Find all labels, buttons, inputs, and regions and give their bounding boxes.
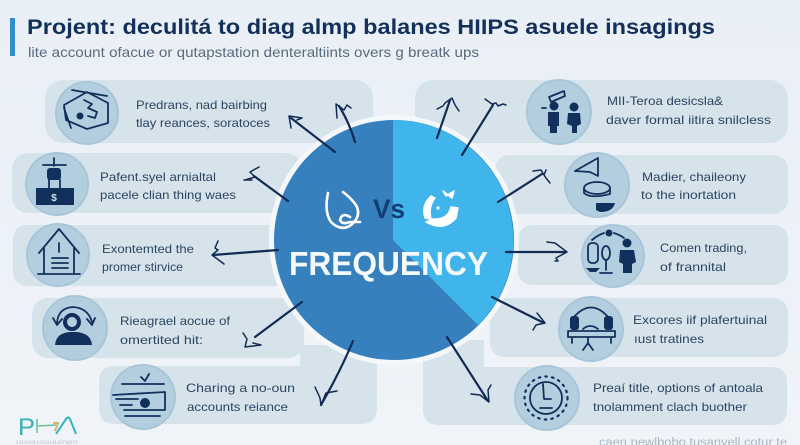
arrow: right 1a — [437, 98, 459, 138]
arrow: right 5 — [447, 337, 491, 402]
arrow: right 4 — [492, 297, 545, 330]
text block: tlay reances, soratoces — [136, 116, 270, 130]
text block — [606, 94, 771, 127]
arrow: right 3 — [506, 242, 567, 261]
arrow: left 1b — [336, 104, 355, 142]
panel: left 4 — [32, 296, 304, 360]
icon: money stand: $ — [51, 193, 57, 204]
icon: people cycle — [582, 225, 644, 287]
icon: hexagon — [56, 82, 118, 144]
text block: ıust tratines — [634, 332, 704, 346]
panel: right 2 — [495, 153, 788, 217]
text block: Madier, chaileony — [642, 170, 746, 184]
text block: accounts reiance — [187, 400, 288, 414]
icon: money stand — [26, 153, 88, 215]
panel: right 3 — [518, 225, 788, 287]
panel: left 2 — [12, 153, 302, 215]
icon: clock — [515, 366, 579, 430]
text block: MII-Teroa desicsla& — [607, 94, 723, 108]
text block — [186, 381, 295, 414]
text block: Predrans, nad bairbing — [136, 98, 267, 112]
text block: tnolamment clach buother — [593, 400, 747, 414]
text block — [102, 242, 194, 274]
text block: of frannital — [660, 260, 726, 274]
text block — [136, 98, 270, 130]
text block — [120, 314, 231, 347]
arrow: left 5 — [315, 341, 353, 405]
icon: cone and disc — [565, 153, 629, 217]
arrow: left 1a — [289, 116, 335, 152]
icon: left white glyph — [327, 192, 360, 228]
text block: Comen trading, — [660, 241, 747, 255]
icon: headphones desk — [559, 297, 623, 361]
arrow: left 3 — [212, 241, 278, 264]
logo: P — [18, 414, 35, 441]
text block: pacele clian thing waes — [100, 188, 236, 202]
icon: house — [27, 224, 89, 286]
text block — [660, 241, 747, 274]
text block — [593, 381, 763, 414]
icon: checklist card — [111, 365, 175, 429]
panel: right 1 — [415, 80, 788, 144]
text block: to the inortation — [641, 188, 736, 202]
central circle — [269, 115, 519, 365]
text block: Excores iif plafertuinal — [633, 313, 767, 327]
panel: left 5 — [99, 345, 377, 429]
logo — [16, 414, 79, 445]
text block: Charing a no-oun — [186, 381, 295, 395]
arrow: right 2 — [498, 170, 550, 202]
subtitle: lite account ofacue or qutapstation denteraltiints overs g breatk ups — [28, 44, 479, 60]
label: FREQUENCY: FREQUENCY — [289, 245, 488, 282]
panel: left 3 — [13, 224, 288, 286]
text block: Pafent.syel arnialtal — [100, 170, 216, 184]
icon: person with arrows — [43, 296, 107, 360]
text block — [100, 170, 236, 202]
arrow: right 1b — [462, 99, 506, 155]
text block: Exontemted the — [102, 242, 194, 256]
arrow: left 4 — [243, 302, 302, 347]
text block: omertited hit: — [120, 333, 203, 347]
icon: right white glyph — [424, 191, 458, 226]
panel: left 1 — [45, 80, 373, 144]
text block: Preaí title, options of antoala — [593, 381, 763, 395]
panel: right 4 — [490, 297, 788, 361]
text block — [641, 170, 746, 202]
text block: daver formal iitira snilcless — [606, 113, 771, 127]
icon: two people — [527, 80, 591, 144]
title: Projent: deculitá to diag almp balanes HIIPS asuele insagings — [27, 16, 715, 39]
label: Vs: Vs — [373, 194, 405, 224]
text block: promer stirvice — [102, 260, 183, 274]
arrow: left 2 — [244, 167, 288, 201]
text block: Rieagrael aocue of — [120, 314, 231, 328]
panel: right 5 — [423, 340, 787, 430]
text block — [633, 313, 767, 346]
accent bar — [10, 18, 15, 56]
